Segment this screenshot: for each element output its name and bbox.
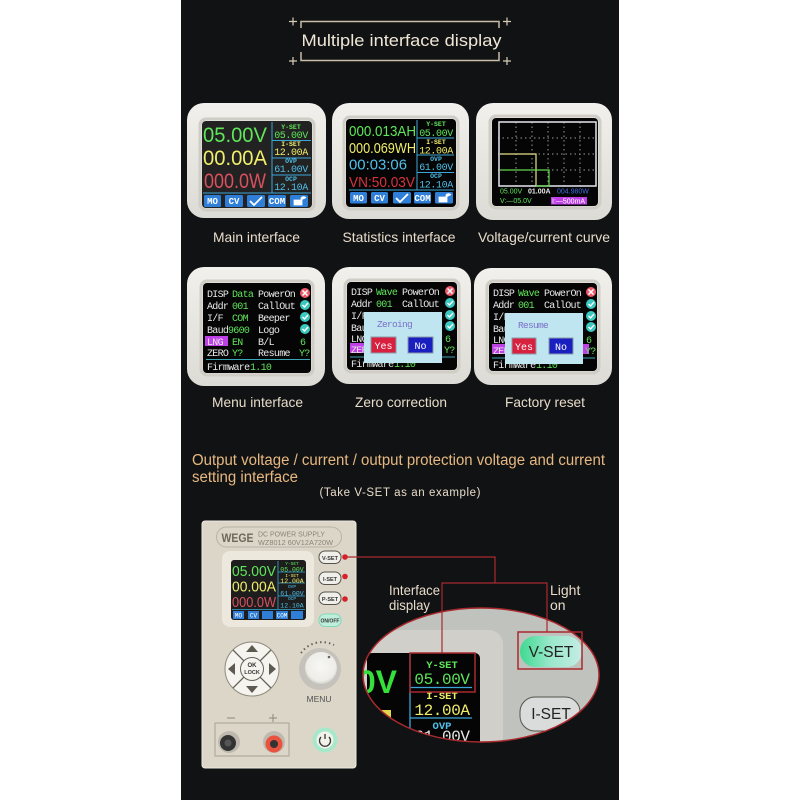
panel: menu interface: COM bbox=[232, 314, 249, 325]
panel: main interface bbox=[187, 103, 326, 218]
panel: zero correction: CallOut bbox=[402, 299, 439, 311]
panel: voltage/current curve: 004.980W bbox=[557, 188, 589, 196]
label: voltage/current curve: Voltage/current curve bbox=[478, 229, 610, 245]
panel: statistics interface: MO bbox=[353, 194, 364, 204]
panel: main interface: 05.00V bbox=[274, 131, 308, 142]
magnified view: V-SET detail: OVP bbox=[433, 721, 451, 733]
label: factory reset: Factory reset bbox=[505, 394, 585, 410]
panel: zero correction: Bau bbox=[351, 324, 368, 335]
panel: menu interface: Beeper bbox=[258, 314, 291, 325]
panel: main interface: I-SET bbox=[281, 141, 301, 148]
panel: statistics interface: 05.00V bbox=[419, 129, 453, 140]
panel: menu interface: Data bbox=[232, 290, 254, 301]
panel: main interface: 12.00A bbox=[274, 148, 308, 159]
output terminals bbox=[215, 714, 289, 756]
device: power supply front panel bbox=[202, 521, 356, 768]
callout lines bbox=[342, 554, 547, 653]
panel: menu interface: 1.10 bbox=[250, 363, 272, 374]
panel: menu interface: Y? bbox=[232, 349, 243, 360]
panel: statistics interface: I-SET bbox=[426, 139, 446, 146]
panel: statistics interface: 12.00A bbox=[419, 146, 453, 158]
panel: voltage/current curve bbox=[476, 103, 612, 220]
panel: zero correction: 1.10 bbox=[394, 360, 416, 371]
panel: menu interface: 9600 bbox=[228, 326, 250, 337]
icon: power button bbox=[312, 728, 338, 752]
infographic bbox=[181, 0, 619, 800]
panel: menu interface: ZERO bbox=[207, 349, 229, 360]
device buttons: V-SET bbox=[322, 556, 339, 562]
panel: menu interface: Resume bbox=[258, 349, 291, 360]
device screen: 05.00V bbox=[232, 564, 276, 580]
panel: main interface: OVP bbox=[285, 158, 297, 165]
panel: factory reset: Firmware bbox=[493, 360, 536, 372]
panel: statistics interface: COM bbox=[414, 194, 431, 204]
panel: menu interface: 6 bbox=[300, 338, 306, 349]
device brand plate: DC POWER SUPPLY bbox=[258, 530, 325, 538]
panel: statistics interface: 61.00V bbox=[419, 163, 453, 174]
panel: main interface: 000.0W bbox=[204, 170, 266, 193]
dark background panel bbox=[181, 0, 619, 800]
device screen bbox=[222, 551, 314, 627]
panel: main interface: 00.00A bbox=[203, 147, 267, 170]
panel: factory reset: 001 bbox=[518, 301, 535, 312]
panel: factory reset: ZER bbox=[493, 347, 510, 358]
panel: factory reset: 6 bbox=[586, 336, 592, 347]
icon: direction pad: LOCK bbox=[244, 670, 260, 676]
panel: menu interface: DISP bbox=[207, 290, 229, 301]
magnified view: V-SET detail: 61.00V bbox=[414, 728, 470, 746]
panel: zero correction: LNG bbox=[351, 335, 368, 346]
device brand plate: WZ8012 60V12A720W bbox=[258, 538, 334, 547]
device screen: COM bbox=[277, 612, 288, 620]
section heading: setting interface bbox=[192, 469, 298, 486]
panel: menu interface: Y? bbox=[299, 349, 310, 360]
panel: factory reset: LNG bbox=[493, 336, 510, 347]
panel: statistics interface: 00:03:06 bbox=[349, 156, 407, 174]
panel: main interface: Y-SET bbox=[281, 124, 301, 131]
callout: interface display: Interface bbox=[389, 582, 440, 598]
panel: menu interface: I/F bbox=[207, 313, 224, 325]
panel: menu interface: LNG bbox=[207, 338, 224, 349]
magnified view: V-SET detail: I-SET bbox=[531, 706, 571, 723]
magnified view: V-SET detail: V-SET bbox=[529, 644, 574, 661]
device screen: OVP bbox=[288, 584, 296, 590]
panel: zero correction: Addr bbox=[351, 299, 373, 311]
callout: light on bbox=[550, 582, 580, 613]
panel: zero correction: 001 bbox=[376, 300, 393, 311]
panel: statistics interface bbox=[332, 103, 469, 219]
label: statistics interface: Statistics interface bbox=[342, 229, 456, 245]
panel: zero correction bbox=[332, 267, 471, 384]
panel: statistics interface: 000.013AH bbox=[349, 123, 416, 140]
panel: factory reset: Wave bbox=[518, 289, 540, 300]
panel: main interface: 61.00V bbox=[274, 165, 308, 176]
panel: factory reset: DISP bbox=[493, 289, 515, 300]
device screen: 05.00V bbox=[280, 566, 304, 574]
section note: (Take V-SET as an example) bbox=[320, 487, 481, 499]
panel: main interface: 12.10A bbox=[274, 183, 308, 194]
panel: factory reset: PowerOn bbox=[544, 289, 582, 300]
device screen: 000.0W bbox=[232, 595, 276, 611]
device brand plate bbox=[216, 527, 342, 547]
panel: main interface: 05.00V bbox=[203, 124, 267, 147]
device screen: I-SET bbox=[285, 573, 299, 579]
panel: main interface: OCP bbox=[285, 176, 297, 183]
panel: statistics interface: OVP bbox=[430, 156, 442, 163]
panel: main interface: CV bbox=[229, 197, 240, 207]
device screen: Y-SET bbox=[285, 561, 299, 567]
panel: zero correction: 6 bbox=[445, 335, 451, 346]
callout: interface display: display bbox=[389, 597, 430, 613]
magnified view: V-SET detail: 12.00A bbox=[414, 702, 470, 720]
device buttons bbox=[319, 551, 341, 626]
panel: voltage/current curve: 05.00V bbox=[500, 188, 523, 196]
callout: light on: Light bbox=[550, 582, 580, 598]
device screen: 00.00A bbox=[232, 580, 276, 596]
panel: menu interface: CallOut bbox=[258, 301, 295, 313]
panel: factory reset: Bau bbox=[493, 325, 510, 336]
device screen: CV bbox=[250, 612, 257, 620]
icon: direction pad: OK bbox=[248, 663, 257, 669]
section heading bbox=[192, 452, 606, 486]
panel: menu interface: PowerOn bbox=[258, 290, 296, 301]
panel: menu interface: Firmware bbox=[207, 362, 250, 374]
panel: factory reset: No bbox=[555, 343, 567, 354]
device buttons: ON/OFF bbox=[321, 618, 339, 624]
panel: factory reset bbox=[474, 268, 612, 385]
panel: main interface: MO bbox=[207, 197, 218, 207]
label: menu interface: Menu interface bbox=[212, 394, 303, 410]
panel: zero correction: Wave bbox=[376, 288, 398, 299]
panel: menu interface: EN bbox=[232, 338, 243, 349]
device screen: 12.00A bbox=[280, 578, 304, 585]
title bbox=[289, 18, 511, 65]
icon: menu knob bbox=[299, 642, 341, 704]
panel: statistics interface: 12.10A bbox=[419, 180, 453, 192]
panel: statistics interface: OCP bbox=[430, 173, 442, 180]
panel: voltage/current curve: 01.00A bbox=[528, 188, 551, 196]
panel: factory reset: Y? bbox=[585, 347, 596, 358]
panel: menu interface: Addr bbox=[207, 301, 229, 313]
panel: factory reset: I/F bbox=[493, 312, 510, 324]
panel: zero correction: DISP bbox=[351, 288, 373, 299]
device screen: MO bbox=[235, 612, 242, 620]
panel: factory reset: Addr bbox=[493, 300, 515, 312]
panel: statistics interface: Y-SET bbox=[426, 121, 446, 128]
panel: main interface: COM bbox=[269, 197, 285, 207]
label: main interface: Main interface bbox=[213, 229, 300, 245]
title: Multiple interface display bbox=[302, 31, 502, 50]
panel: zero correction: Yes bbox=[374, 342, 393, 353]
panel: zero correction: Y? bbox=[444, 346, 455, 357]
magnified view: V-SET detail: 0V bbox=[358, 664, 398, 700]
panel: factory reset: 1.10 bbox=[536, 361, 558, 372]
magnified view: V-SET detail: 05.00V bbox=[414, 671, 470, 689]
panel: zero correction: Zeroing bbox=[377, 319, 412, 330]
icon: menu knob: MENU bbox=[306, 694, 332, 704]
device buttons: P-SET bbox=[322, 597, 339, 603]
device buttons: I-SET bbox=[323, 577, 338, 583]
panel: menu interface: Logo bbox=[258, 326, 280, 337]
panel: factory reset: Yes bbox=[515, 343, 533, 354]
panel: factory reset: Resume bbox=[518, 320, 549, 331]
magnified view: V-SET detail bbox=[362, 607, 600, 743]
panel: statistics interface: CV bbox=[374, 194, 385, 204]
callout: light on: on bbox=[550, 597, 566, 613]
panel: statistics interface: 000.069WH bbox=[349, 140, 416, 157]
section heading: Output voltage / current / output protection voltage and current bbox=[192, 452, 606, 469]
magnified view: V-SET detail: Y-SET bbox=[426, 660, 458, 672]
panel: zero correction: I/F bbox=[351, 311, 368, 323]
panel: zero correction: Firmware bbox=[351, 359, 394, 371]
panel: menu interface bbox=[187, 267, 325, 386]
callout: interface display bbox=[389, 582, 440, 613]
panel: zero correction: No bbox=[414, 342, 427, 353]
magnified view: V-SET detail: I-SET bbox=[426, 691, 458, 703]
panel: factory reset: CallOut bbox=[544, 300, 581, 312]
panel: voltage/current curve: I:—500mA bbox=[552, 198, 585, 206]
panel: menu interface: Baud bbox=[207, 325, 229, 337]
panel: menu interface: 001 bbox=[232, 302, 249, 313]
device screen: 12.10A bbox=[280, 602, 304, 610]
icon: direction pad bbox=[225, 642, 279, 696]
panel: zero correction: ZER bbox=[351, 346, 368, 357]
panel: voltage/current curve: V:—05.0V bbox=[500, 198, 532, 205]
label: zero correction: Zero correction bbox=[355, 394, 447, 410]
panel: zero correction: PowerOn bbox=[402, 288, 440, 299]
device brand plate: WEGE bbox=[222, 531, 254, 545]
device screen: 61.00V bbox=[280, 590, 304, 598]
panel: statistics interface: VN:50.03V bbox=[349, 174, 415, 191]
panel: menu interface: B/L bbox=[258, 337, 275, 349]
device screen: OCP bbox=[288, 596, 296, 602]
